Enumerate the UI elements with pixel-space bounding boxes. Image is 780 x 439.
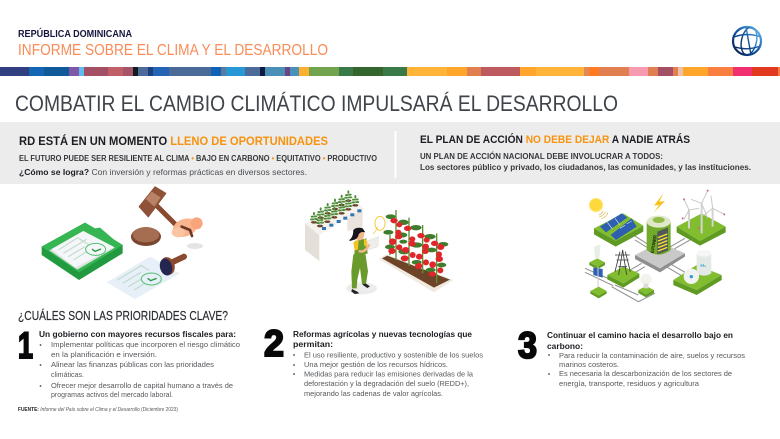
woman	[346, 216, 385, 294]
main title: COMBATIR EL CAMBIO CLIMÁTICO IMPULSARÁ EL DESARROLLO	[15, 91, 618, 116]
priority 3: low-carbon development: 3	[518, 325, 537, 366]
shelf	[305, 190, 363, 261]
priority 1: fiscal resources: 1	[18, 325, 33, 366]
priority 3: low-carbon development: carbono:	[547, 341, 583, 351]
panel text: opportunities: EL FUTURO PUEDE SER RESILIENTE AL CLIMA • BAJO EN CARBONO • EQUITATIVO • PRODUCTIVO	[19, 154, 377, 163]
illustration: woman with tablet, hydroponics and tomato plants	[305, 190, 453, 294]
wind platform	[677, 190, 726, 246]
priority 2: agricultural reforms: deforestación y la degradación del suelo (REDD+),	[304, 379, 469, 388]
priority 2: agricultural reforms: Medidas para reducir las emisiones derivadas de la	[304, 370, 474, 378]
panel text: action plan: EL PLAN DE ACCIÓN NO DEBE DEJAR A NADIE ATRÁS	[420, 133, 690, 146]
heading: key priorities: ¿CUÁLES SON LAS PRIORIDADES CLAVE?	[18, 308, 228, 323]
header: country and report name	[18, 27, 328, 59]
priority 2: agricultural reforms: 2	[264, 323, 284, 364]
priority 3: low-carbon development: marinos costeros.	[559, 360, 619, 369]
header: country and report name: INFORME SOBRE EL CLIMA Y EL DESARROLLO	[18, 42, 328, 59]
panel text: opportunities	[19, 135, 377, 177]
header: country and report name: REPÚBLICA DOMINICANA	[18, 27, 132, 40]
gavel	[131, 187, 203, 249]
priority 1: fiscal resources: Un gobierno con mayores recursos fiscales para:	[39, 329, 236, 339]
battery: E-POWER	[650, 234, 658, 254]
priority 3: low-carbon development: Para reducir la contaminación de aire, suelos y recursos	[559, 351, 745, 360]
illustration: documents, gavel and stamp	[42, 187, 203, 299]
priority 1: fiscal resources	[18, 325, 240, 399]
small energy nodes	[589, 244, 654, 298]
solar platform	[594, 213, 643, 247]
panel text: action plan: UN PLAN DE ACCIÓN NACIONAL DEBE INVOLUCRAR A TODOS:	[420, 152, 663, 161]
priority 3: low-carbon development: Continuar el camino hacia el desarrollo bajo en	[547, 330, 733, 340]
panel text: opportunities: RD ESTÁ EN UN MOMENTO LLENO DE OPORTUNIDADES	[19, 135, 328, 148]
source note: FUENTE: Informe del País sobre el Clima y el Desarrollo (Diciembre 2023)	[18, 407, 178, 413]
priority 2: agricultural reforms: mejorando las cadenas de valor agrícolas.	[304, 389, 443, 398]
sun	[589, 198, 608, 219]
colour band	[0, 67, 780, 76]
panel text: opportunities: ¿Cómo se logra? Con inversión y reformas prácticas en diversos sectores.	[19, 168, 307, 177]
stamped paper	[107, 255, 184, 299]
illustration: clean energy network	[585, 190, 726, 302]
priority 2: agricultural reforms: Una mejor gestión de los recursos hídricos.	[304, 360, 448, 369]
priority 1: fiscal resources: Implementar políticas que incorporen el riesgo climático	[51, 340, 240, 349]
priority 1: fiscal resources: Ofrecer mejor desarrollo de capital humano a través de	[51, 381, 233, 390]
priority 2: agricultural reforms: permitan:	[293, 339, 333, 349]
wiring	[585, 235, 690, 302]
hydrogen platform	[673, 250, 722, 295]
tomato bed	[379, 210, 453, 292]
priority 1: fiscal resources: Alinear las finanzas públicas con las prioridades	[51, 360, 214, 369]
priority 1: fiscal resources: en la planificación e inversión.	[51, 350, 157, 359]
priority 2: agricultural reforms: Reformas agrícolas y nuevas tecnologías que	[293, 329, 472, 339]
panel text: action plan	[420, 133, 751, 172]
priority 2: agricultural reforms: El uso resiliente, productivo y sostenible de los suelos	[304, 350, 483, 360]
priority 2: agricultural reforms	[264, 323, 483, 398]
priority 1: fiscal resources: climáticas.	[51, 370, 84, 379]
priority 3: low-carbon development: Es necesaria la descarbonización de los sectores de	[559, 369, 732, 378]
hydrogen platform: H₂	[700, 263, 706, 269]
icon: World Bank globe logo	[733, 26, 761, 56]
priority 3: low-carbon development	[518, 325, 745, 388]
panel: summary band	[0, 122, 780, 184]
lightning	[654, 193, 665, 212]
transmission tower platform	[607, 250, 639, 288]
battery	[635, 216, 685, 272]
panel text: action plan: Los sectores público y privado, los ciudadanos, las comunidades, y las instituciones.	[420, 163, 751, 172]
priority 3: low-carbon development: energía, transporte, residuos y agricultura	[559, 379, 700, 388]
priority 1: fiscal resources: programas activos del mercado laboral.	[51, 390, 173, 399]
tray	[42, 223, 123, 280]
